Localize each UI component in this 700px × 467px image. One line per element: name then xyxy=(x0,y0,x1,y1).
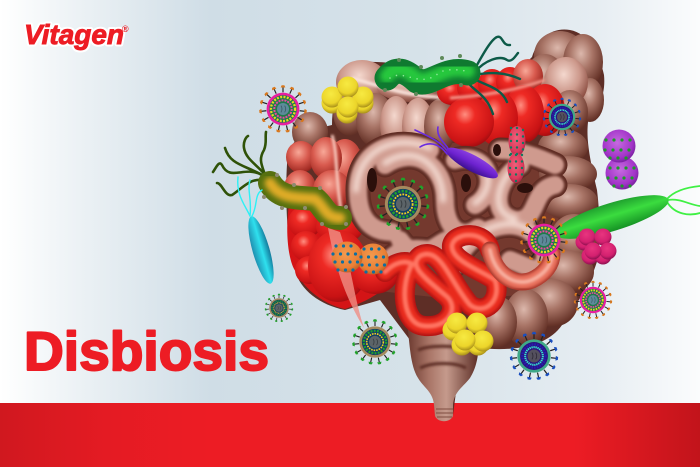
coccus pair: orange xyxy=(332,242,388,274)
colon lumps: rectum xyxy=(407,323,479,421)
virus: pink top left xyxy=(259,85,307,133)
Vitagen logo: ® xyxy=(122,24,129,34)
Vitagen logo: Vitagen xyxy=(24,19,124,50)
intestine illustration xyxy=(284,30,604,421)
colon lumps: upper right xyxy=(525,31,604,134)
bottom red band xyxy=(0,403,700,467)
yellow cluster bottom xyxy=(442,312,494,356)
appendix xyxy=(328,228,364,328)
colon lumps: transverse red xyxy=(437,59,565,147)
bacterium: purple rod xyxy=(415,127,501,184)
colon lumps: ascending salmon and red xyxy=(284,112,399,302)
virus: green centre xyxy=(377,178,429,230)
bacterium: large green rod xyxy=(551,186,700,248)
virus: pink small right xyxy=(574,281,612,319)
colon lumps: transverse pink xyxy=(333,60,460,154)
coccus pair: pink xyxy=(508,126,526,183)
virus: teal upper right xyxy=(543,98,581,136)
bacterium: cyan rod xyxy=(238,177,279,286)
dark crevices xyxy=(367,144,533,245)
magenta cluster xyxy=(576,228,616,264)
Vitagen logo: Vitagen xyxy=(24,19,124,50)
virus: green small left xyxy=(265,294,293,322)
title: Disbiosis xyxy=(24,320,269,382)
ascending colon red body xyxy=(287,205,400,309)
colon base silhouette xyxy=(286,30,604,420)
yellow cluster top xyxy=(322,76,374,124)
bacterium: olive left xyxy=(213,132,348,226)
virus: green bottom xyxy=(352,319,398,365)
coccus pair: purple xyxy=(602,130,638,190)
virus: teal bottom xyxy=(510,332,558,380)
bacterium: green top xyxy=(383,37,520,114)
red small intestine loops xyxy=(385,235,552,326)
virus: pink centre right xyxy=(520,216,568,264)
small intestine backdrop xyxy=(345,140,560,300)
small intestine pink tubes xyxy=(356,143,555,269)
colon lumps: descending xyxy=(479,129,598,348)
